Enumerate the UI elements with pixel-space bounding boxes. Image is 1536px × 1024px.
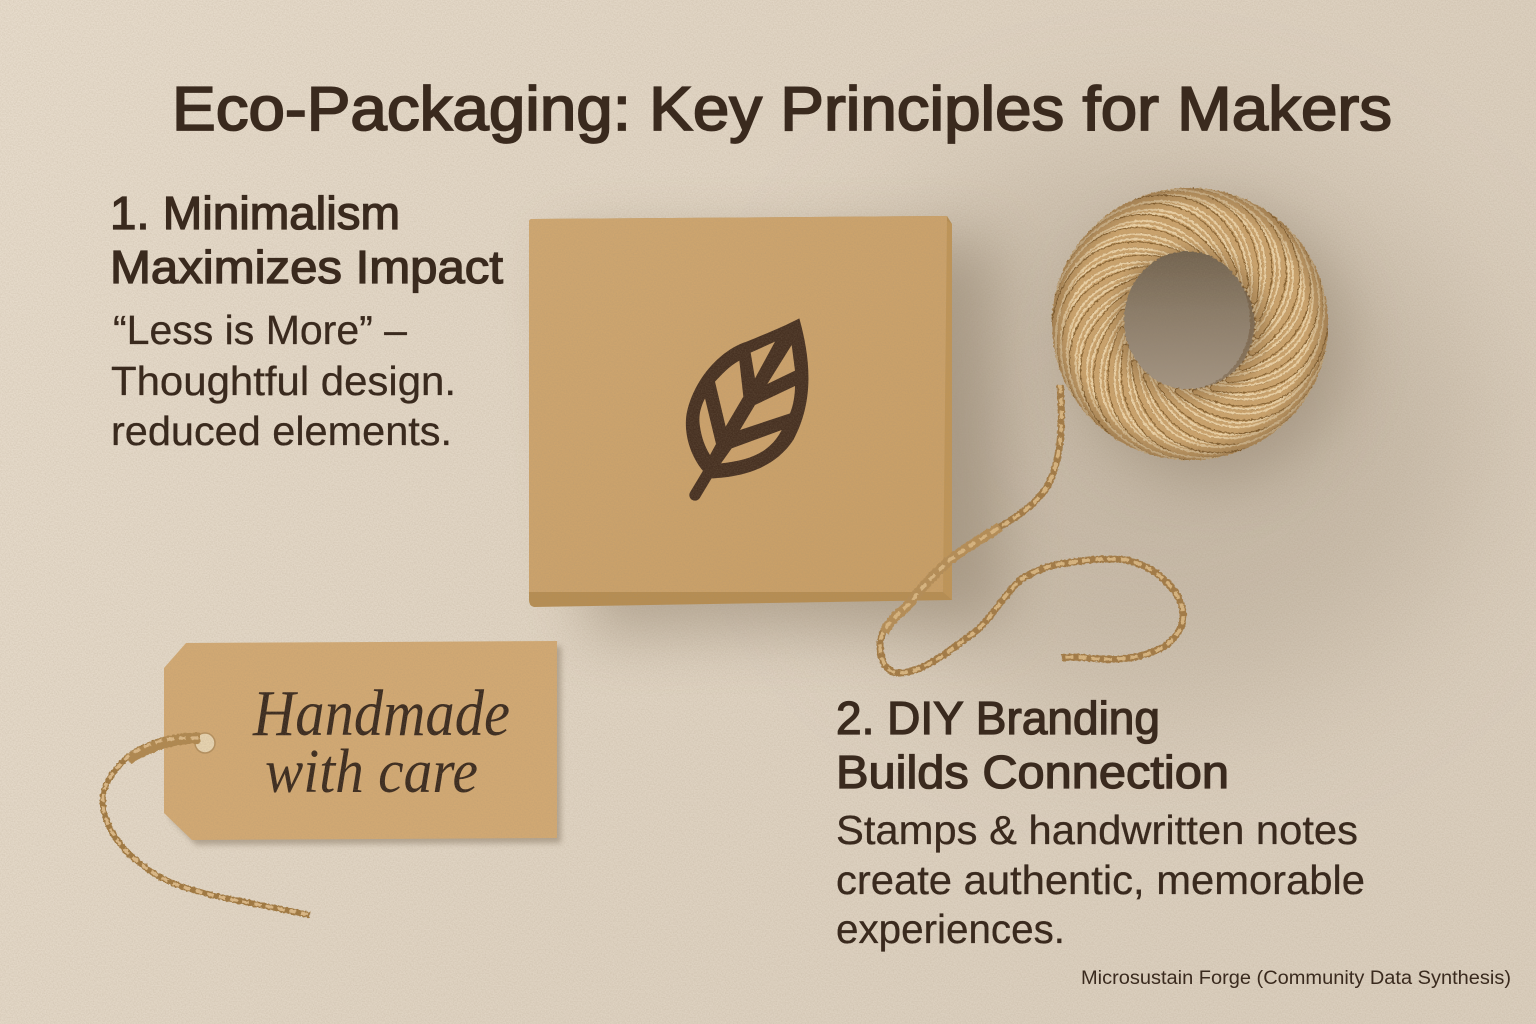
section 2 body: experiences. <box>836 906 1065 952</box>
twine ball shadow <box>1074 209 1350 481</box>
icon: leaf stamp <box>686 318 808 495</box>
section 2 heading: Builds Connection <box>836 746 1229 798</box>
loose twine strand <box>880 385 1183 673</box>
section 2: DIY branding <box>836 692 1365 952</box>
tag handwriting: with care <box>265 738 478 806</box>
section 2 body <box>836 807 1365 952</box>
section 1 heading: 1. Minimalism <box>110 187 400 239</box>
section 1 body: Thoughtful design. <box>111 358 456 404</box>
soft background shading <box>820 150 1480 710</box>
source credit: Microsustain Forge (Community Data Synthesis) <box>1081 968 1511 989</box>
tag handwriting <box>252 677 510 806</box>
section 1 heading <box>110 187 503 293</box>
shipping tag <box>164 641 557 840</box>
section 1 body: reduced elements. <box>111 408 452 454</box>
section 1 heading: Maximizes Impact <box>110 241 503 293</box>
section 1 body <box>111 307 456 454</box>
box shadow <box>560 240 1005 635</box>
tag eyelet <box>195 733 215 753</box>
tag twine <box>103 738 310 915</box>
section 1: minimalism <box>110 187 503 454</box>
tag handwriting: Handmade <box>252 677 510 750</box>
section 1 body: “Less is More” – <box>113 307 407 353</box>
section 2 body: Stamps & handwritten notes <box>836 807 1358 853</box>
twine ball <box>1052 187 1328 460</box>
section 2 body: create authentic, memorable <box>836 857 1365 903</box>
shipping tag shadow <box>170 646 561 845</box>
section 2 heading <box>836 692 1229 798</box>
title: Eco-Packaging: Key Principles for Makers <box>172 75 1392 144</box>
kraft gift box <box>529 216 952 607</box>
section 2 heading: 2. DIY Branding <box>836 692 1160 744</box>
